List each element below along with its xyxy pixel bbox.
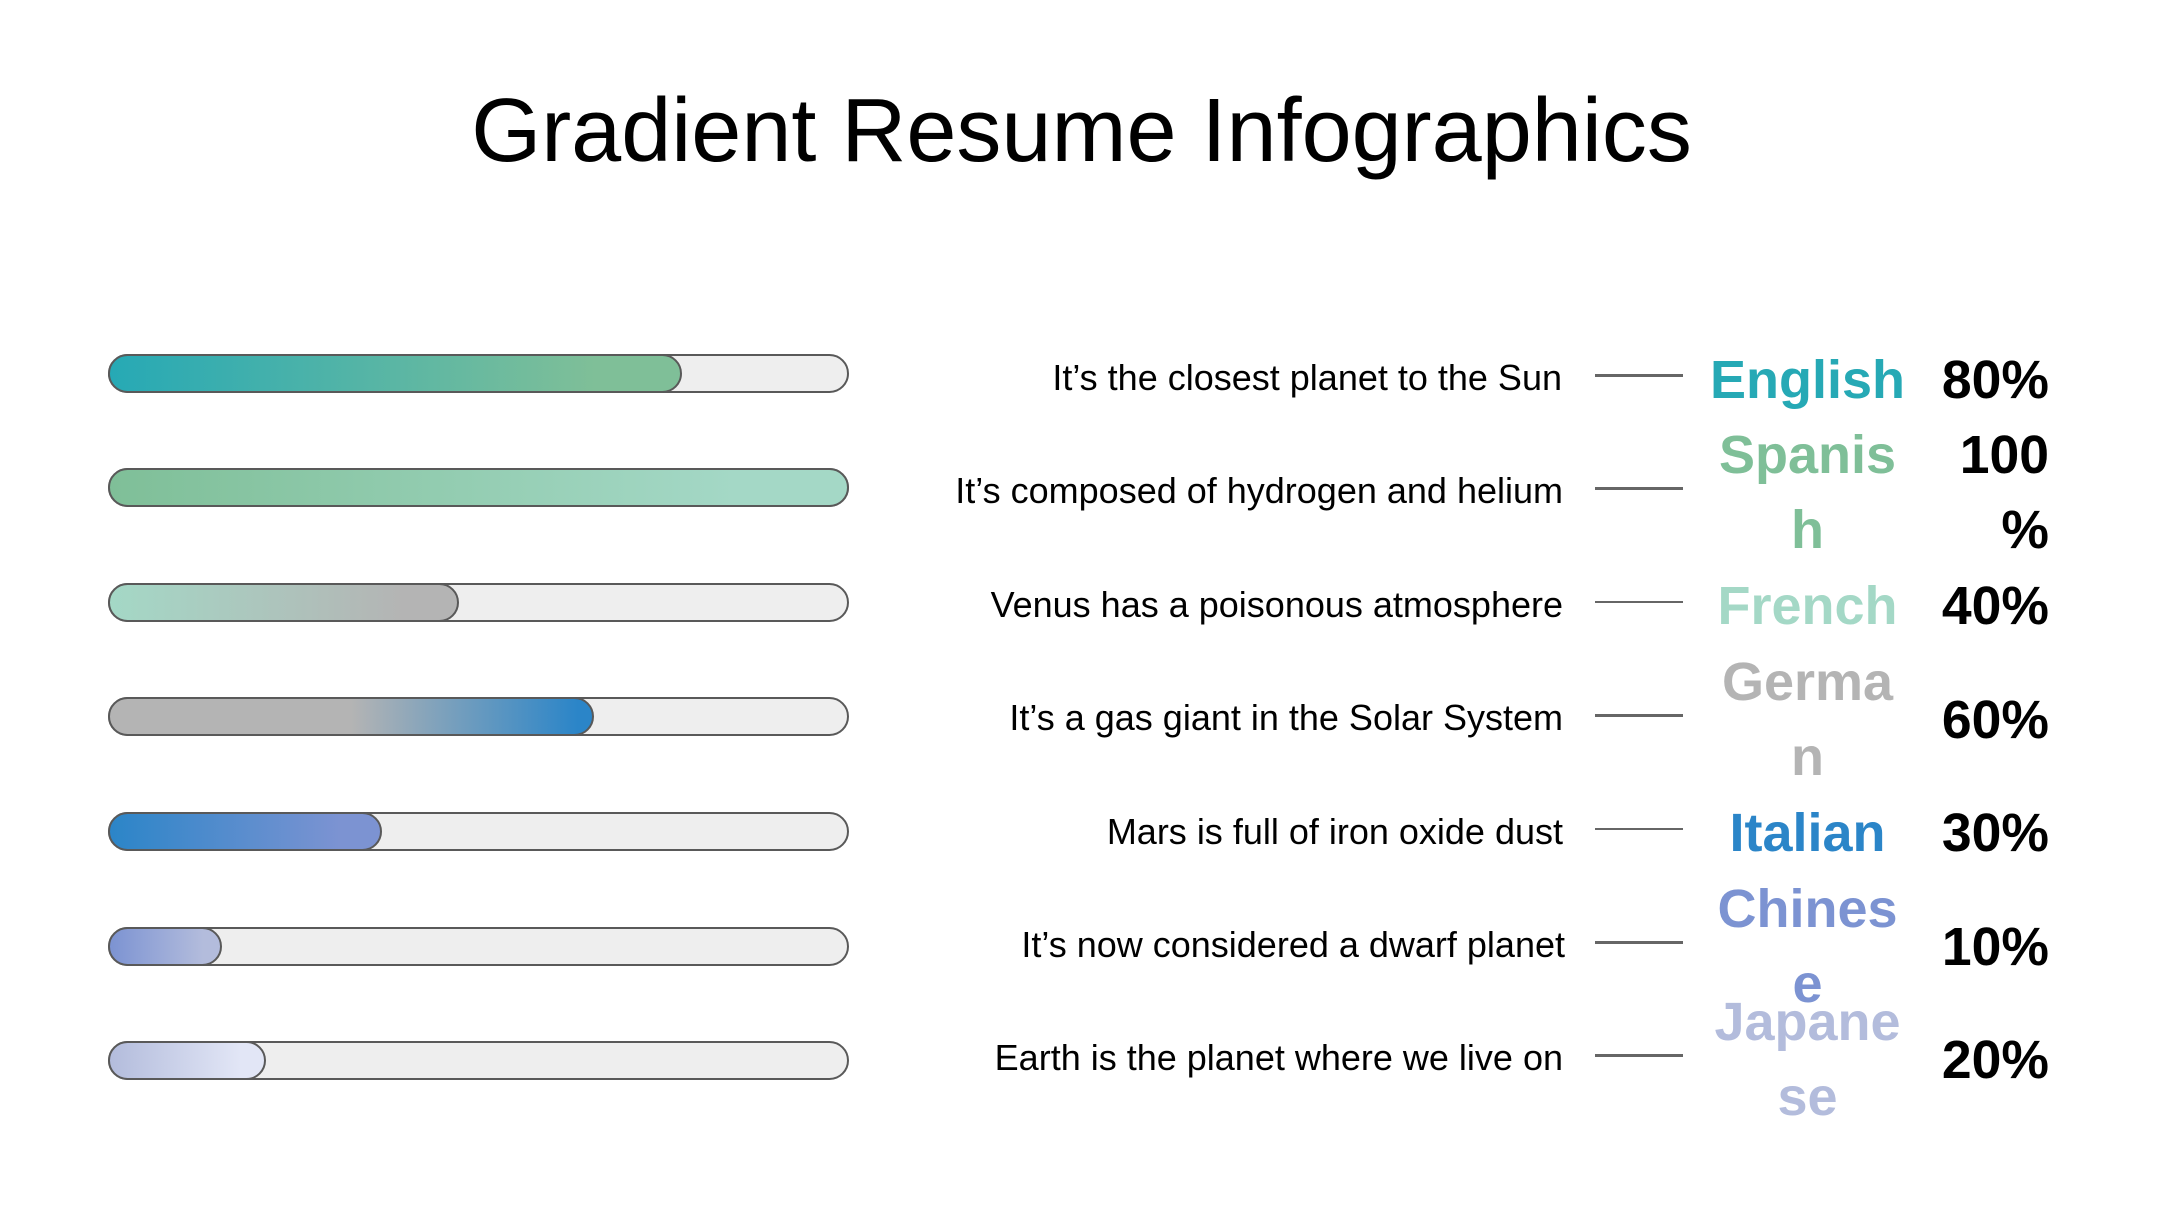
skill bar track: English — [108, 354, 849, 393]
description: Italian: Mars is full of iron oxide dust — [1107, 811, 1563, 852]
row: Chinese — [108, 879, 2049, 1014]
row: Japanese — [108, 992, 2049, 1127]
language: Italian: Italian — [1729, 803, 1886, 863]
percentage: German: 60% — [1942, 691, 2049, 750]
percentage: Spanish: % — [2001, 501, 2049, 560]
language: English: English — [1710, 350, 1905, 410]
skill bar track: Spanish — [108, 468, 849, 507]
row: German — [108, 652, 2049, 787]
language: Chinese: Chinese — [1717, 879, 1898, 1014]
skill bar fill: Italian — [108, 812, 382, 851]
skill bar fill: Chinese — [108, 926, 222, 966]
row: Italian — [108, 803, 2049, 863]
percentage: English: 80% — [1942, 350, 2049, 410]
description: Japanese: Earth is the planet where we live on — [995, 1037, 1563, 1078]
percentage: Spanish: 100 — [1960, 426, 2049, 485]
language: French: French — [1717, 576, 1898, 636]
connector: French — [1595, 601, 1683, 603]
description: German: It’s a gas giant in the Solar System — [1009, 697, 1563, 738]
skill bar fill: German — [108, 697, 594, 736]
title: Gradient Resume Infographics — [471, 81, 1692, 181]
connector: Chinese — [1595, 941, 1683, 944]
skill bar fill: English — [108, 354, 682, 393]
skill bar fill: Japanese — [108, 1041, 266, 1080]
percentage: Japanese: 20% — [1942, 1031, 2049, 1090]
skill bar track: Chinese — [108, 926, 849, 966]
percentage: Chinese: 10% — [1942, 918, 2049, 976]
row: English — [108, 350, 2049, 410]
percentage: Spanish — [1960, 426, 2049, 560]
language: German: German — [1722, 652, 1893, 787]
language: Japanese: Japanese — [1714, 992, 1901, 1127]
connector: Italian — [1595, 828, 1683, 830]
row: Spanish — [108, 425, 2049, 560]
connector: German — [1595, 714, 1683, 717]
skill bar track: French — [108, 583, 849, 622]
skill bar fill: French — [108, 583, 459, 622]
connector: Japanese — [1595, 1054, 1683, 1057]
description: French: Venus has a poisonous atmosphere — [991, 584, 1563, 625]
skill bar track: German — [108, 697, 849, 736]
row: French — [108, 576, 2049, 636]
language: Spanish: Spanish — [1719, 425, 1896, 560]
connector: Spanish — [1595, 487, 1683, 490]
skill bar track: Japanese — [108, 1041, 849, 1080]
connector: English — [1595, 374, 1683, 376]
percentage: Italian: 30% — [1942, 804, 2049, 863]
skill bar fill: Spanish — [108, 468, 849, 507]
skill bar track: Italian — [108, 812, 849, 851]
percentage: French: 40% — [1942, 577, 2049, 636]
description: Spanish: It’s composed of hydrogen and helium — [955, 470, 1563, 511]
description: English: It’s the closest planet to the Sun — [1052, 357, 1562, 398]
description: Chinese: It’s now considered a dwarf planet — [1021, 924, 1565, 965]
